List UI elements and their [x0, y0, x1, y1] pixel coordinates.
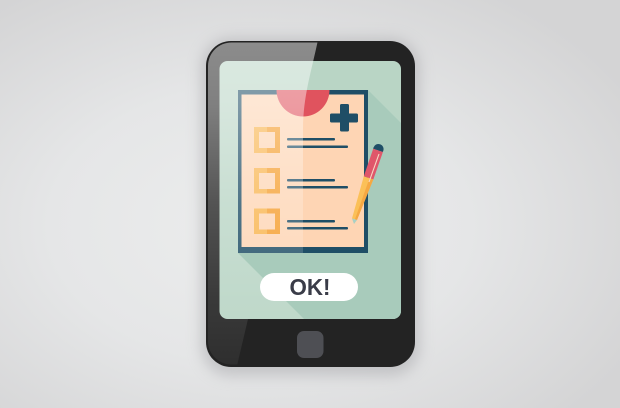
pencil red band	[364, 149, 383, 180]
OK button	[260, 273, 358, 301]
phone shadow	[201, 38, 420, 376]
checklist row 3	[254, 208, 348, 234]
pencil body shade	[355, 178, 373, 220]
checklist row 2	[254, 168, 348, 194]
pencil body	[352, 176, 373, 220]
home button	[297, 331, 324, 358]
glass glare	[208, 42, 318, 364]
red clip	[276, 90, 330, 116]
pencil highlight	[369, 154, 379, 182]
checklist row 1	[254, 127, 348, 153]
clipboard long shadow	[238, 90, 410, 330]
clipboard	[238, 90, 368, 253]
clipboard frame	[238, 90, 368, 253]
pencil eraser	[373, 144, 384, 152]
phone	[200, 35, 415, 370]
pencil tip	[352, 218, 357, 224]
pencil	[352, 144, 384, 224]
phone body	[206, 41, 415, 367]
plus icon	[330, 104, 358, 132]
paper	[242, 94, 364, 247]
screen	[220, 61, 410, 330]
OK label: OK!	[290, 274, 330, 300]
